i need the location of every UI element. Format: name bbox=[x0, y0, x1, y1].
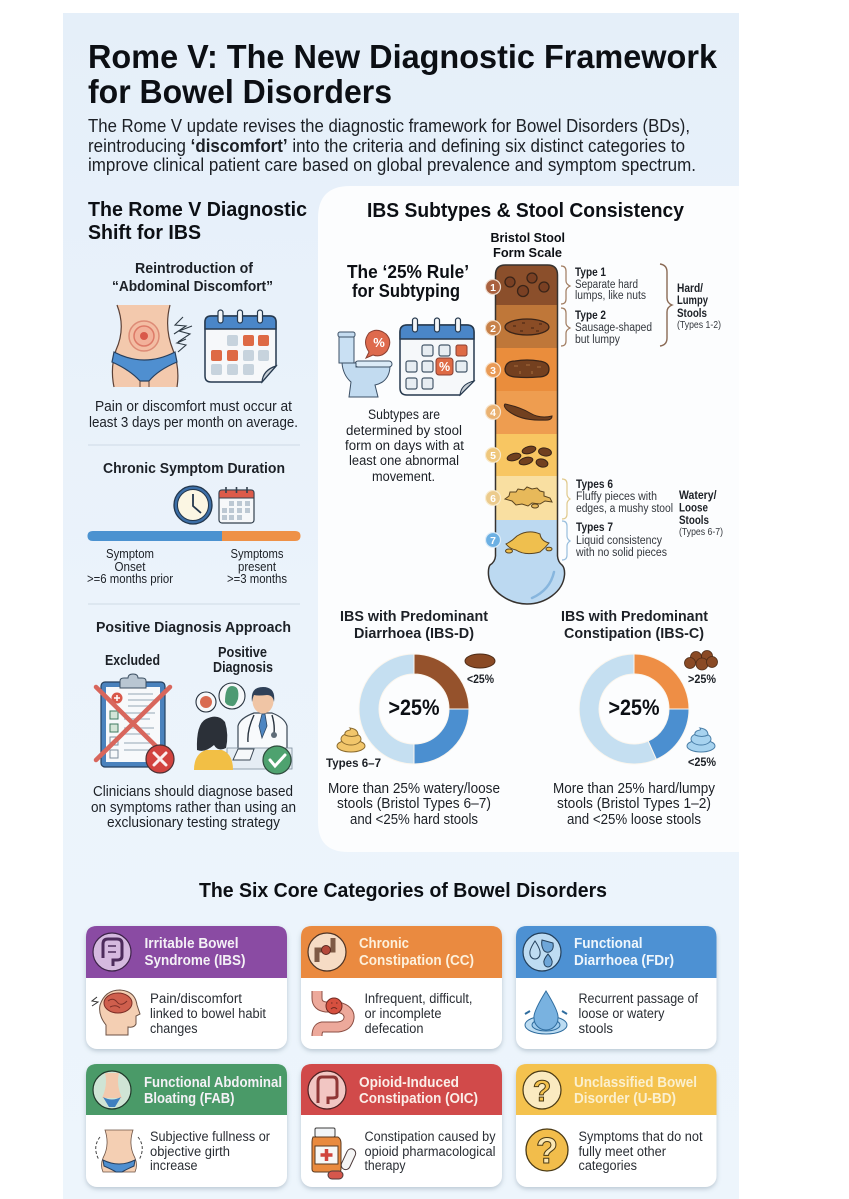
icon: abdomen with pain bbox=[112, 305, 192, 387]
timeline bar bbox=[88, 531, 300, 541]
chart: IBS-D donut bbox=[359, 654, 469, 764]
number markers: 7 bbox=[490, 535, 496, 547]
stool type 5 bbox=[506, 445, 552, 468]
icon: opioid medicine bbox=[312, 1128, 357, 1179]
label: symptom onset: Symptom bbox=[106, 547, 154, 561]
heading: IBS-D: Diarrhoea (IBS-D) bbox=[354, 626, 474, 642]
label: symptoms present bbox=[227, 547, 287, 586]
chart: IBS-C donut: >25% bbox=[608, 695, 660, 720]
stool type 3 bbox=[505, 360, 549, 378]
chart: IBS-C donut bbox=[579, 654, 689, 764]
panel: IBS subtypes background bbox=[318, 186, 739, 852]
intro text: The Rome V update revises the diagnostic framework for Bowel Disorders (BDs), bbox=[88, 116, 690, 136]
heading: diagnostic shift: The Rome V Diagnostic bbox=[88, 198, 307, 221]
card: chronic constipation: Chronic bbox=[359, 936, 409, 952]
text: IBS-C description: and <25% loose stools bbox=[567, 812, 701, 828]
heading: six core categories: The Six Core Categories of Bowel Disorders bbox=[199, 879, 607, 902]
label: excluded: Excluded bbox=[105, 653, 160, 669]
icon: small calendar bbox=[219, 487, 254, 523]
label: watery loose stools: Watery/ bbox=[679, 490, 717, 502]
brace: type 7 bbox=[562, 521, 570, 560]
intro text: reintroducing ‘discomfort’ into the criteria and defining six distinct categories to bbox=[88, 136, 685, 156]
card: chronic constipation bbox=[301, 926, 502, 1049]
stool type 2 bbox=[505, 319, 549, 335]
heading: IBS subtypes: IBS Subtypes & Stool Consistency bbox=[367, 199, 685, 222]
heading: abdominal discomfort: Reintroduction of bbox=[135, 261, 253, 277]
icon: blocked intestine bbox=[317, 991, 349, 1036]
icon: head with brain bbox=[92, 990, 140, 1035]
label: IBS-C under 25: <25% bbox=[688, 757, 716, 769]
text: IBS-C description bbox=[553, 781, 716, 828]
text: subtype rule: Subtypes are bbox=[368, 407, 440, 422]
number markers: 5 bbox=[490, 450, 496, 462]
card: chronic constipation: or incomplete bbox=[364, 1006, 442, 1021]
text: IBS-D description: More than 25% watery/loose bbox=[328, 781, 500, 797]
heading: positive diagnosis approach: Positive Diagnosis Approach bbox=[96, 620, 291, 636]
label: types 6: Types 6 bbox=[576, 479, 613, 491]
number markers: 2 bbox=[490, 323, 496, 335]
title: for Bowel Disorders bbox=[88, 73, 392, 110]
card: unclassified bowel disorder: Symptoms that do not bbox=[578, 1129, 703, 1144]
heading: IBS-C bbox=[561, 609, 708, 642]
text: subtype rule bbox=[345, 407, 464, 484]
heading: Bristol stool form scale: Form Scale bbox=[493, 245, 562, 260]
stool type 4 bbox=[504, 404, 552, 420]
text: subtype rule: form on days with at bbox=[345, 438, 464, 453]
icon: bloated abdomen bbox=[96, 1130, 142, 1172]
label: watery loose stools bbox=[679, 490, 723, 538]
heading: diagnostic shift bbox=[88, 198, 307, 244]
label: types 6: Fluffy pieces with bbox=[576, 491, 657, 503]
card: functional diarrhoea: stools bbox=[578, 1021, 613, 1036]
heading: chronic symptom duration: Chronic Symptom Duration bbox=[103, 461, 285, 477]
chart: Bristol stool tube bbox=[485, 262, 570, 610]
icon: yellow stool, IBS-D bbox=[337, 728, 365, 752]
label: types 7: Types 7 bbox=[576, 522, 613, 534]
label: positive diagnosis: Positive bbox=[218, 645, 267, 661]
card: unclassified bowel disorder: Disorder (U-BD) bbox=[574, 1091, 676, 1107]
brace: type 1 bbox=[561, 266, 570, 304]
chart: IBS-D donut: >25% bbox=[388, 695, 440, 720]
label: types 6-7: Types 6–7 bbox=[326, 756, 381, 770]
card: opioid-induced constipation: Constipation caused by bbox=[364, 1129, 496, 1144]
card: irritable bowel syndrome: changes bbox=[150, 1021, 198, 1036]
label: type 2 bbox=[575, 310, 652, 346]
text: IBS-D description: and <25% hard stools bbox=[350, 812, 478, 828]
heading: diagnostic shift: Shift for IBS bbox=[88, 221, 201, 244]
icon: doctor and patient consultation bbox=[194, 683, 292, 774]
icon: toilet bbox=[338, 332, 392, 397]
text: pain frequency: least 3 days per month on average. bbox=[89, 415, 298, 431]
text: subtype rule: movement. bbox=[372, 469, 435, 484]
label: IBS-D under 25: <25% bbox=[467, 674, 494, 686]
text: IBS-D description bbox=[328, 781, 500, 828]
icon: percent bubble: % bbox=[373, 335, 385, 350]
text: pain frequency: Pain or discomfort must occur at bbox=[95, 399, 292, 415]
card: irritable bowel syndrome: linked to bowel habit bbox=[150, 1006, 266, 1021]
number markers bbox=[486, 280, 500, 548]
number markers: 6 bbox=[490, 493, 496, 505]
card: functional abdominal bloating: objective girth bbox=[150, 1144, 230, 1159]
icon: percent bubble bbox=[366, 330, 390, 358]
heading: 25 percent rule: The ‘25% Rule’ bbox=[347, 262, 469, 282]
label: types 7: with no solid pieces bbox=[575, 547, 667, 559]
text: clinicians advice: exclusionary testing strategy bbox=[107, 815, 281, 831]
label: type 1 bbox=[575, 267, 646, 302]
label: hard lumpy stools bbox=[677, 283, 721, 331]
label: watery loose stools: (Types 6-7) bbox=[679, 526, 723, 538]
card: opioid-induced constipation: opioid pharmacological bbox=[364, 1144, 496, 1159]
number markers: 4 bbox=[490, 407, 496, 419]
label: type 1: lumps, like nuts bbox=[575, 290, 646, 302]
card: functional abdominal bloating: Bloating (FAB) bbox=[144, 1091, 235, 1107]
text: clinicians advice: on symptoms rather than using an bbox=[91, 800, 296, 816]
icon: calendar with percent bbox=[400, 318, 474, 395]
card: irritable bowel syndrome: Pain/discomfort bbox=[150, 991, 242, 1006]
card: functional abdominal bloating bbox=[86, 1064, 287, 1187]
card: functional diarrhoea: loose or watery bbox=[578, 1006, 665, 1021]
heading: 25 percent rule bbox=[347, 262, 469, 301]
heading: abdominal discomfort: “Abdominal Discomfort” bbox=[112, 279, 273, 295]
label: watery loose stools: Loose bbox=[679, 502, 708, 514]
background panel bbox=[63, 13, 739, 1199]
card: unclassified bowel disorder: Unclassified Bowel bbox=[574, 1075, 697, 1091]
text: IBS-C description: stools (Bristol Types 1–2) bbox=[557, 796, 711, 812]
heading: IBS-C: Constipation (IBS-C) bbox=[564, 626, 704, 642]
brace: hard stools bbox=[660, 264, 672, 346]
number markers: 3 bbox=[490, 365, 496, 377]
icon: blue stool, IBS-C bbox=[687, 728, 715, 752]
label: positive diagnosis bbox=[213, 645, 273, 676]
brace: type 6 bbox=[562, 479, 570, 519]
card: opioid-induced constipation: Opioid-Induced bbox=[359, 1075, 459, 1091]
heading: IBS-D: IBS with Predominant bbox=[340, 609, 488, 625]
icon: brown stool, IBS-D bbox=[465, 654, 495, 668]
number markers: 1 bbox=[490, 282, 496, 294]
card: opioid-induced constipation: Constipation (OIC) bbox=[359, 1091, 478, 1107]
heading: abdominal discomfort bbox=[112, 261, 273, 295]
label: symptoms present: present bbox=[238, 560, 276, 574]
icon: calendar with pain days bbox=[205, 310, 276, 382]
title: Rome V: The New Diagnostic Framework bbox=[88, 38, 718, 75]
icon: calendar with percent: % bbox=[439, 360, 450, 374]
icon: excluded clipboard bbox=[96, 674, 174, 773]
label: symptom onset: >=6 months prior bbox=[87, 572, 173, 586]
heading: Bristol stool form scale: Bristol Stool bbox=[490, 230, 565, 245]
label: hard lumpy stools: Hard/ bbox=[677, 283, 704, 295]
card: unclassified bowel disorder: fully meet other bbox=[578, 1144, 666, 1159]
label: symptom onset bbox=[87, 547, 173, 586]
card: functional abdominal bloating: increase bbox=[150, 1158, 198, 1173]
card: functional diarrhoea: Diarrhoea (FDr) bbox=[574, 953, 674, 969]
card: functional diarrhoea bbox=[516, 926, 716, 1049]
label: hard lumpy stools: Lumpy bbox=[677, 295, 708, 307]
card: chronic constipation: Infrequent, difficult, bbox=[364, 991, 472, 1006]
card: unclassified bowel disorder: categories bbox=[578, 1158, 637, 1173]
label: watery loose stools: Stools bbox=[679, 515, 709, 527]
stool type 6 bbox=[505, 487, 552, 508]
card: chronic constipation: defecation bbox=[364, 1021, 424, 1036]
card: functional abdominal bloating: Functional Abdominal bbox=[144, 1075, 282, 1091]
card: functional diarrhoea: Recurrent passage of bbox=[578, 991, 698, 1006]
text: subtype rule: determined by stool bbox=[346, 423, 462, 438]
stool type 1 bbox=[505, 273, 549, 296]
icon: clock bbox=[174, 486, 212, 524]
label: symptom onset: Onset bbox=[114, 560, 146, 574]
label: positive diagnosis: Diagnosis bbox=[213, 660, 273, 676]
text: IBS-C description: More than 25% hard/lumpy bbox=[553, 781, 716, 797]
label: types 7: Liquid consistency bbox=[576, 535, 662, 547]
label: type 1: Separate hard bbox=[575, 279, 638, 291]
card: unclassified bowel disorder bbox=[516, 1064, 716, 1187]
label: hard lumpy stools: Stools bbox=[677, 308, 707, 320]
intro text: improve clinical patient care based on global prevalence and symptom spectrum. bbox=[88, 155, 696, 175]
label: types 6 bbox=[576, 479, 673, 515]
card: irritable bowel syndrome: Irritable Bowel bbox=[144, 936, 238, 952]
text: IBS-D description: stools (Bristol Types 6–7) bbox=[337, 796, 491, 812]
label: hard lumpy stools: (Types 1-2) bbox=[677, 319, 721, 331]
card: unclassified bowel disorder: ? bbox=[533, 1075, 551, 1108]
heading: Bristol stool form scale bbox=[490, 230, 565, 260]
intro text bbox=[88, 116, 696, 175]
label: symptoms present: Symptoms bbox=[230, 547, 284, 561]
card: opioid-induced constipation: therapy bbox=[364, 1158, 406, 1173]
label: IBS-C over 25: >25% bbox=[688, 674, 716, 686]
heading: IBS-D bbox=[340, 609, 488, 642]
heading: 25 percent rule: for Subtyping bbox=[352, 281, 460, 301]
stool type 7 bbox=[506, 532, 552, 554]
label: types 7 bbox=[575, 522, 667, 559]
label: type 1: Type 1 bbox=[575, 267, 607, 279]
text: clinicians advice: Clinicians should diagnose based bbox=[93, 784, 293, 800]
label: type 2: Type 2 bbox=[575, 310, 606, 322]
text: pain frequency bbox=[89, 399, 298, 431]
label: types 6: edges, a mushy stool bbox=[576, 503, 673, 515]
card: irritable bowel syndrome: Syndrome (IBS) bbox=[144, 953, 246, 969]
card: functional abdominal bloating: Subjective fullness or bbox=[150, 1129, 270, 1144]
icon: water drop bbox=[525, 991, 567, 1034]
panel: IBS subtypes and stool consistency bbox=[326, 199, 723, 828]
brace: type 2 bbox=[561, 308, 570, 346]
card: opioid-induced constipation bbox=[301, 1064, 502, 1187]
label: symptoms present: >=3 months bbox=[227, 572, 287, 586]
panel: Rome V diagnostic shift bbox=[87, 198, 307, 831]
label: type 2: Sausage-shaped bbox=[575, 322, 652, 334]
label: type 2: but lumpy bbox=[575, 334, 620, 346]
card: chronic constipation: Constipation (CC) bbox=[359, 953, 474, 969]
icon: question mark: ? bbox=[536, 1130, 558, 1171]
heading: IBS-C: IBS with Predominant bbox=[561, 609, 708, 625]
text: subtype rule: least one abnormal bbox=[349, 453, 459, 468]
title bbox=[88, 38, 718, 110]
icon: hard stool clump, IBS-C bbox=[684, 650, 718, 670]
icon: question mark bbox=[526, 1129, 568, 1171]
text: clinicians advice bbox=[91, 784, 296, 831]
card: irritable bowel syndrome bbox=[86, 926, 287, 1049]
card: functional diarrhoea: Functional bbox=[574, 936, 642, 952]
